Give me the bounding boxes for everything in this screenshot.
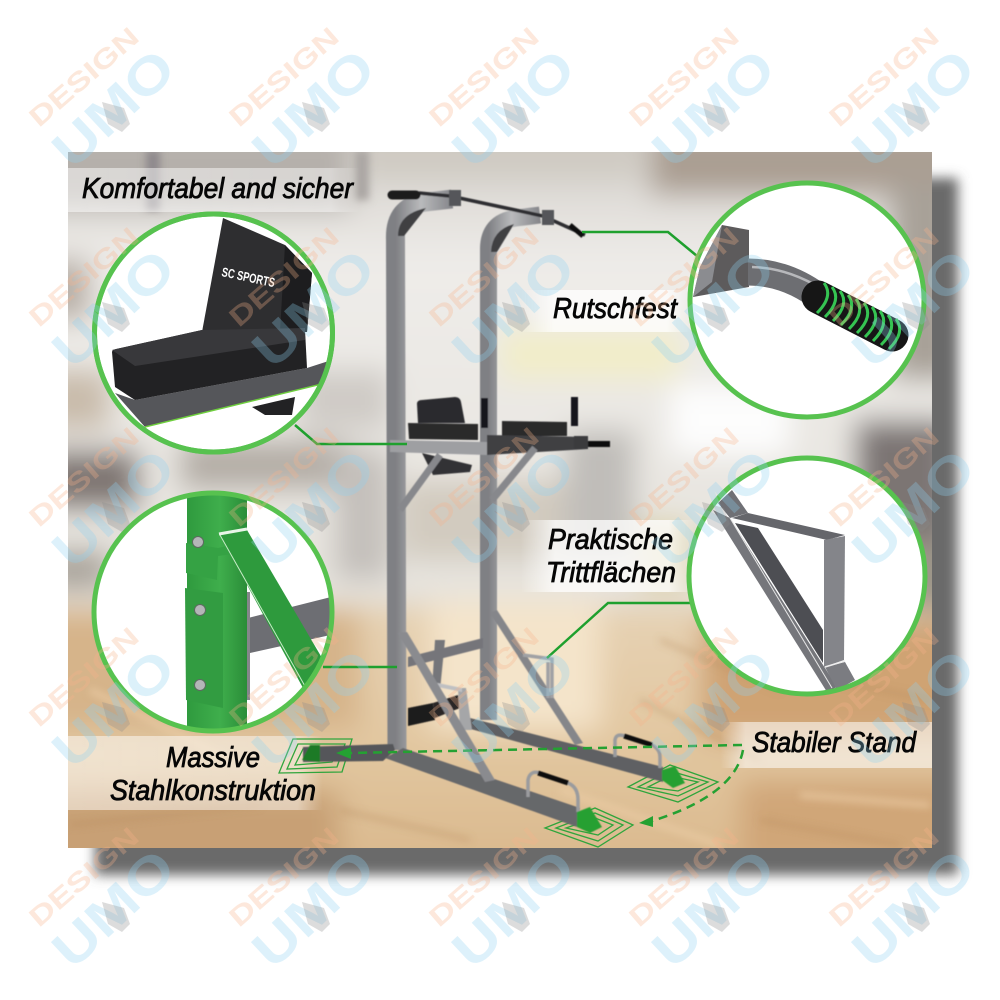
- front handle: [528, 772, 578, 812]
- rubber grip with green stripes: [817, 283, 900, 349]
- watermark grid: UMO: [441, 838, 587, 980]
- crossbar between uprights: [408, 638, 483, 667]
- watermark grid: DESIGN: [223, 221, 345, 333]
- gray crossbar: [250, 598, 330, 653]
- inner dark diagonal: [735, 523, 823, 663]
- label band: Rutschfest: [520, 290, 692, 332]
- watermark grid: DESIGN: [423, 621, 545, 733]
- watermark grid: UMO: [41, 38, 187, 180]
- watermark grid: DESIGN: [623, 621, 745, 733]
- watermark grid: DESIGN: [623, 421, 745, 533]
- drop shadow behind photo: [95, 178, 958, 875]
- front leg: [385, 748, 580, 827]
- marker: front foot: [545, 808, 633, 847]
- lower back pad: [422, 453, 472, 475]
- circle: step detail: [689, 458, 925, 694]
- dip handles: [481, 397, 578, 428]
- circle: seat detail: [94, 214, 338, 452]
- watermark grid: UMO: [641, 38, 787, 180]
- watermark grid: DESIGN: [823, 421, 945, 533]
- watermark grid: DESIGN: [823, 821, 945, 933]
- watermark grid: UMO: [41, 238, 187, 380]
- watermark grid: DESIGN: [23, 221, 145, 333]
- steel tube: [748, 272, 818, 296]
- frame bar: [115, 358, 338, 427]
- watermark grid: DESIGN: [23, 21, 145, 133]
- back diagonal brace: [490, 610, 583, 745]
- stability dashed arrows: [336, 745, 743, 827]
- vertical bar: [824, 536, 845, 667]
- dip bar frame: [390, 435, 610, 455]
- watermark grid: UMO: [41, 838, 187, 980]
- back leg: [467, 718, 663, 782]
- left ground bar: [303, 744, 395, 762]
- gray backing plate: [247, 592, 250, 700]
- watermark grid: UMO: [641, 238, 787, 380]
- dashed line to left foot: [350, 745, 742, 753]
- watermark grid: UMO: [241, 438, 387, 580]
- line to Stahlkonstruktion circle: [323, 666, 397, 668]
- heading: Massive Stahlkonstruktion: Stahlkonstruktion: [110, 775, 316, 807]
- bolts: [192, 536, 206, 690]
- rear black roller and step: [408, 640, 472, 730]
- watermark grid: UMO: [241, 638, 387, 780]
- long front diagonal: [713, 510, 837, 692]
- watermark grid: DESIGN: [423, 421, 545, 533]
- upper arch shadows: [398, 208, 514, 252]
- line to Rutschfest circle: [582, 232, 697, 256]
- watermark grid: DESIGN: [223, 621, 345, 733]
- watermark grid: UMO: [641, 438, 787, 580]
- background photo: blurred gym interior: [68, 152, 932, 848]
- trittflaeche step frame: [523, 655, 552, 698]
- watermark grid: DESIGN: [823, 621, 945, 733]
- watermark grid: DESIGN: [423, 21, 545, 133]
- lower plate: [185, 588, 223, 708]
- watermark grid: DESIGN: [623, 821, 745, 933]
- watermark grid: DESIGN: [23, 621, 145, 733]
- arrowheads: [336, 747, 653, 827]
- watermark grid: DESIGN: [823, 21, 945, 133]
- backrest with logo: SC SPORTS: [220, 264, 277, 290]
- watermark grid: DESIGN: [223, 821, 345, 933]
- watermark grid: DESIGN: [623, 221, 745, 333]
- left upright: [395, 199, 452, 750]
- watermark grid: UMO: [641, 838, 787, 980]
- dip station seat pads: [408, 421, 567, 440]
- watermark grid: DESIGN: [223, 421, 345, 533]
- watermark grid: UMO: [441, 38, 587, 180]
- green post: [187, 490, 247, 740]
- front diagonal brace: [398, 632, 495, 782]
- heading: Massive Stahlkonstruktion: Massive: [166, 742, 260, 774]
- watermark grid: UMO: [241, 238, 387, 380]
- watermark grid: UMO: [441, 638, 587, 780]
- heading: Komfortabel and sicher: Komfortabel and sicher: [82, 173, 354, 205]
- marker: left foot: [279, 739, 352, 773]
- top bar: [732, 513, 845, 540]
- back leg handle: [615, 735, 660, 768]
- watermark grid: UMO: [841, 238, 987, 380]
- dip station backrest: [417, 397, 465, 423]
- green concentric floor markers: [279, 739, 718, 847]
- watermark grid: UMO: [841, 438, 987, 580]
- watermark grid: DESIGN: [23, 821, 145, 933]
- watermark grid: UMO: [441, 238, 587, 380]
- marker: back foot: [628, 765, 718, 802]
- diagonal brace: [219, 529, 322, 688]
- label band: Stahlkonstruktion: [68, 736, 323, 810]
- power tower machine: [302, 190, 685, 833]
- seat pad: [112, 328, 307, 400]
- watermark grid: DESIGN: [23, 421, 145, 533]
- heading: Massive Stahlkonstruktion: [110, 742, 316, 807]
- line to Trittflaechen circle: [547, 603, 690, 658]
- watermark grid: DESIGN: [223, 21, 345, 133]
- watermark grid: UMO: [41, 638, 187, 780]
- watermark grid: UMO: [641, 638, 787, 780]
- heading: Praktische Trittflaechen: Praktische: [548, 524, 673, 556]
- dashed curve to front foot: [652, 750, 743, 821]
- heading: Rutschfest: Rutschfest: [553, 293, 679, 325]
- watermark grid: UMO: [841, 638, 987, 780]
- watermark grid: UMO: [41, 438, 187, 580]
- line to Komfortabel circle: [295, 425, 407, 444]
- diagonal top: [718, 490, 748, 518]
- watermark grid: UMO: [841, 838, 987, 980]
- lower diagonal: [825, 662, 855, 690]
- label band: Komfortabel: [68, 168, 360, 212]
- label band: Stabiler Stand: [720, 722, 932, 768]
- heading: Praktische Trittflaechen: Trittflächen: [546, 557, 676, 589]
- heading: Stabiler Stand: Stabiler Stand: [752, 727, 917, 759]
- bar bracket: [693, 225, 749, 297]
- watermark grid: UMO: [841, 38, 987, 180]
- circle: steel construction detail: [94, 490, 335, 740]
- under pad: [252, 397, 295, 415]
- watermark grid: UMO: [241, 838, 387, 980]
- dip support braces: [400, 448, 535, 510]
- watermark grid: DESIGN: [423, 821, 545, 933]
- label band: Trittflaechen: [520, 520, 695, 592]
- watermark grid: DESIGN: [823, 221, 945, 333]
- top pull-up bar: [392, 190, 585, 236]
- watermark grid: UMO: [241, 38, 387, 180]
- watermark grid: DESIGN: [423, 221, 545, 333]
- backrest with logo: [202, 218, 312, 332]
- watermark grid: DESIGN: [623, 21, 745, 133]
- right upright: [488, 215, 540, 720]
- heading: Praktische Trittflaechen: [546, 524, 676, 589]
- green callout lines: [295, 232, 697, 667]
- green foot caps: [302, 745, 685, 833]
- circle: grip detail: [690, 183, 924, 417]
- upper bracket: [186, 543, 223, 580]
- watermark grid: UMO: [441, 438, 587, 580]
